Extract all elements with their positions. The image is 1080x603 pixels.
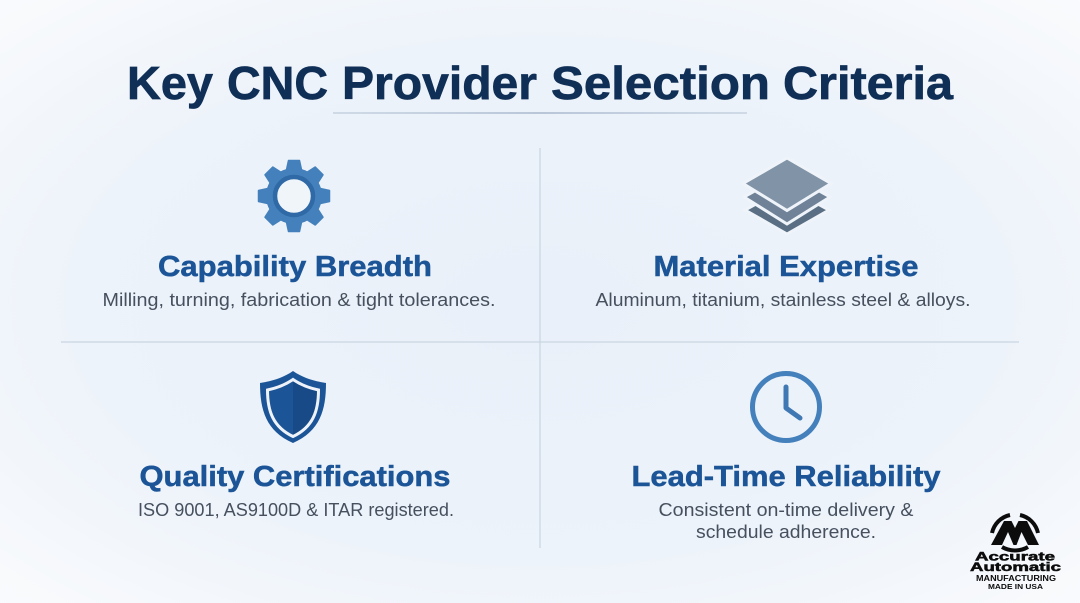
logo: Accurate Automatic: MANUFACTURING [976, 574, 1056, 583]
panel: lead-time reliability [632, 374, 941, 542]
panel: material expertise [596, 158, 970, 310]
title: Key [127, 57, 213, 109]
icon: clock [752, 374, 820, 440]
heading: Lead-Time Reliability [632, 461, 941, 493]
heading: Capability Breadth [158, 251, 432, 283]
title: Criteria [783, 57, 953, 109]
icon: gear [258, 160, 330, 232]
text block: Aluminum, titanium, stainless steel & alloys. [596, 289, 970, 310]
heading: Quality Certifications [140, 461, 450, 493]
panel: capability breadth [102, 160, 496, 310]
logo: Accurate Automatic [970, 515, 1062, 591]
logo: Accurate Automatic: Automatic [970, 560, 1062, 574]
title [127, 57, 953, 109]
icon: shield [260, 371, 326, 443]
heading: Material Expertise [654, 251, 918, 283]
text block: Milling, turning, fabrication & tight tolerances. [102, 289, 496, 310]
panel: quality certifications [138, 371, 454, 520]
title: CNC [227, 57, 328, 109]
title: Provider [342, 57, 537, 109]
icon: layers [743, 158, 831, 234]
icon: AM monogram [991, 515, 1039, 550]
title: Selection [551, 57, 770, 109]
text block [658, 499, 914, 542]
text block: schedule adherence. [696, 521, 876, 542]
logo wordmark: Accurate [975, 550, 1056, 564]
text block: ISO 9001, AS9100D & ITAR registered. [138, 499, 454, 520]
text block: Consistent on-time delivery & [658, 499, 914, 520]
logo: Accurate Automatic: MADE IN USA [988, 582, 1044, 591]
